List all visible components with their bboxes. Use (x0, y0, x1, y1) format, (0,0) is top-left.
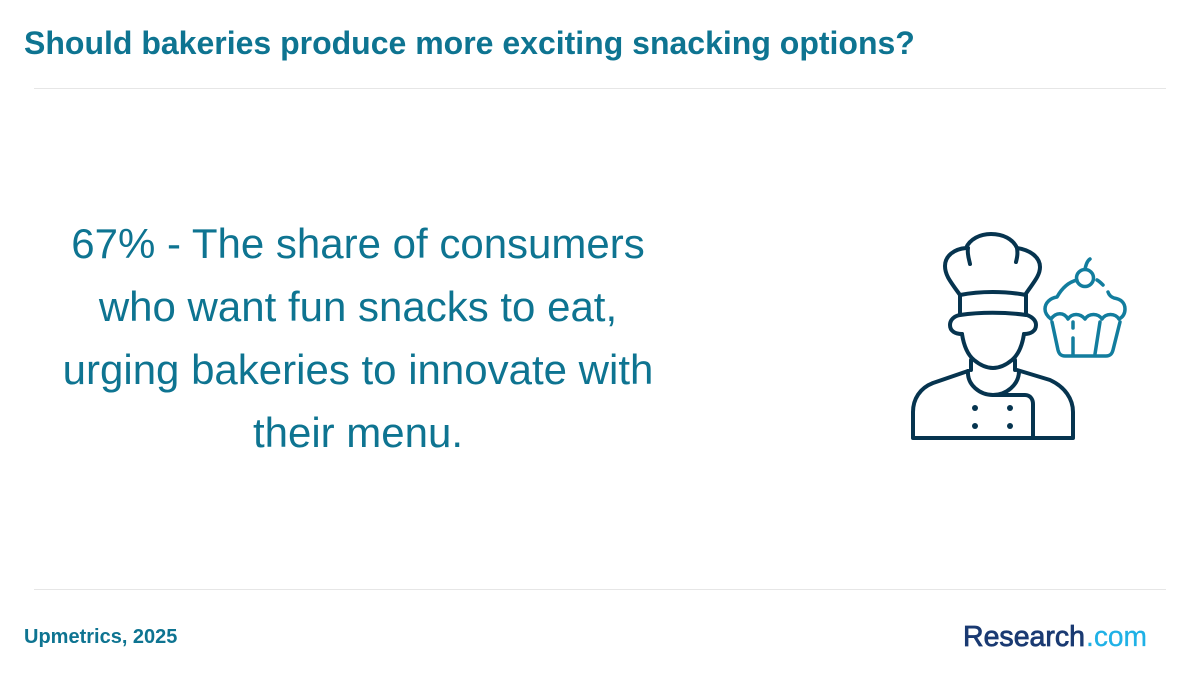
icon: jacket buttons (972, 405, 1013, 429)
logo: Research.com (963, 621, 1147, 653)
main statistic text: 67% - The share of consumers (71, 220, 645, 267)
logo: Research.com: Research (963, 621, 1085, 653)
main statistic text: who want fun snacks to eat, (99, 283, 617, 330)
logo: Research.com: .com (1086, 621, 1147, 653)
source: Upmetrics, 2025 (24, 626, 177, 648)
icon: cupcake (1045, 259, 1125, 356)
title: Should bakeries produce more exciting snacking options? (24, 25, 915, 61)
icon: chef with cupcake (911, 232, 1127, 440)
main statistic text (63, 220, 653, 456)
main statistic text: their menu. (253, 409, 463, 456)
main statistic text: urging bakeries to innovate with (63, 346, 653, 393)
icon: chef (913, 234, 1073, 438)
